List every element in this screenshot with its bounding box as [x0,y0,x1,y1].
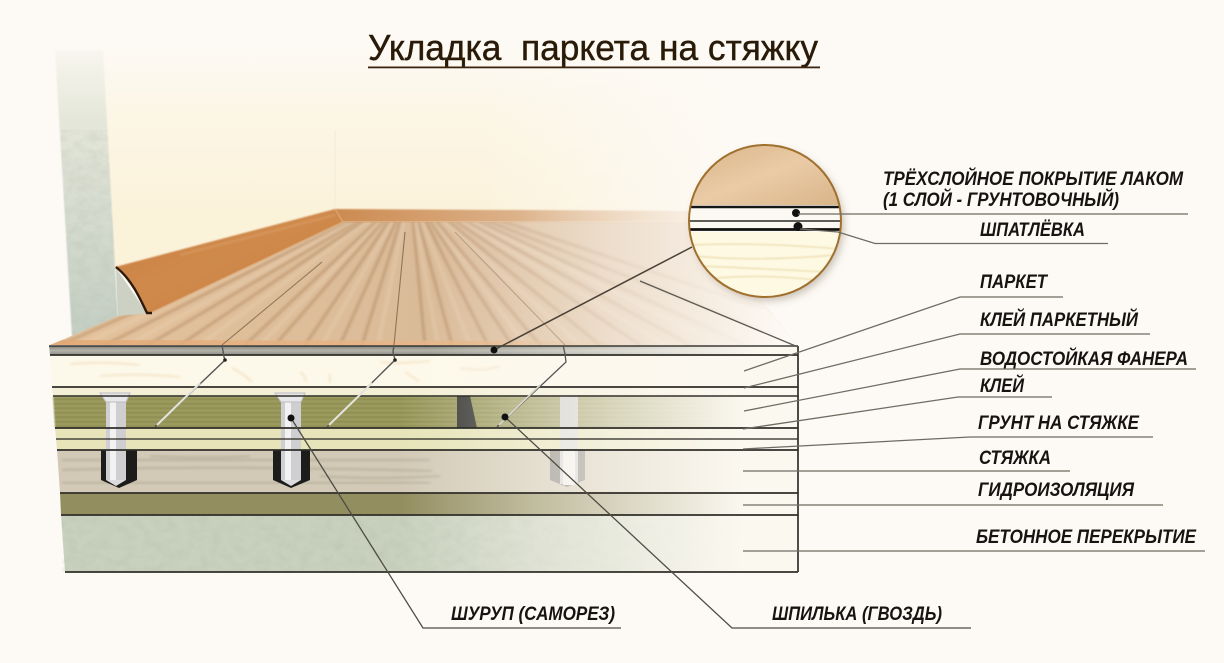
label: parquet [744,272,1063,371]
label: primer on screed [743,413,1153,449]
plank seams on floor [222,232,565,345]
nail 3 [497,345,566,427]
corner shadow below the skirting profile [116,268,147,319]
label: nail [502,414,971,628]
floor front edge [50,340,640,345]
label: parquet glue: КЛЕЙ ПАРКЕТНЫЙ [980,309,1138,331]
label: screed: СТЯЖКА [979,448,1051,469]
callout: finish coat leader from floor to circle [490,247,692,354]
wedge: black spacer [457,396,477,428]
layer: concrete slab [61,515,798,572]
screw 1 in anchor [100,393,137,488]
label: lacquer coat: (1 СЛОЙ - ГРУНТОВОЧНЫЙ) [883,189,1119,211]
label: screw: ШУРУП (САМОРЕЗ) [451,604,615,625]
screw 3 in anchor, faded [550,396,585,487]
label: lacquer coat: ТРЁХСЛОЙНОЕ ПОКРЫТИЕ ЛАКОМ [883,168,1184,190]
title: Укладка паркета на стяжку [368,27,818,68]
floor with wood grain [50,222,797,346]
label: glue: КЛЕЙ [980,375,1024,397]
nails driven through plywood [155,345,566,427]
label: nail: ШПИЛЬКА (ГВОЗДЬ) [772,604,942,625]
label: concrete slab: БЕТОННОЕ ПЕРЕКРЫТИЕ [976,527,1197,548]
label: parquet: ПАРКЕТ [980,272,1048,293]
detail marker dots [792,209,802,231]
label: waterproof plywood [744,348,1196,411]
column at left wall [55,50,120,336]
label: putty [800,220,1108,244]
label: glue [743,375,1052,429]
label: primer on screed: ГРУНТ НА СТЯЖКЕ [978,413,1140,434]
layer: parquet plank / plywood [50,355,798,387]
magnifier circle: finish coat detail [689,145,841,299]
nail 1 [155,345,227,427]
layer: screed [57,450,798,493]
layer: waterproofing [60,493,798,515]
layer: glue and primer [55,428,798,450]
cross-section layers [49,346,798,572]
room: walls [56,56,656,336]
label: lacquer coat [798,168,1188,214]
skirting boards [115,209,700,313]
fade overlay on right side of section [400,356,798,572]
layer boundary lines [49,281,798,572]
label: putty: ШПАТЛЁВКА [980,220,1085,241]
screw 2 in anchor [273,393,310,488]
layer: parquet glue [52,387,798,396]
label: waterproofing: ГИДРОИЗОЛЯЦИЯ [978,480,1135,501]
label: waterproof plywood: ВОДОСТОЙКАЯ ФАНЕРА [980,348,1188,370]
layer: waterproof plywood [53,396,798,428]
layer: parquet top strip [49,346,798,355]
nail 2 [327,345,397,427]
label: screw [288,414,621,628]
label: parquet glue [744,309,1150,388]
